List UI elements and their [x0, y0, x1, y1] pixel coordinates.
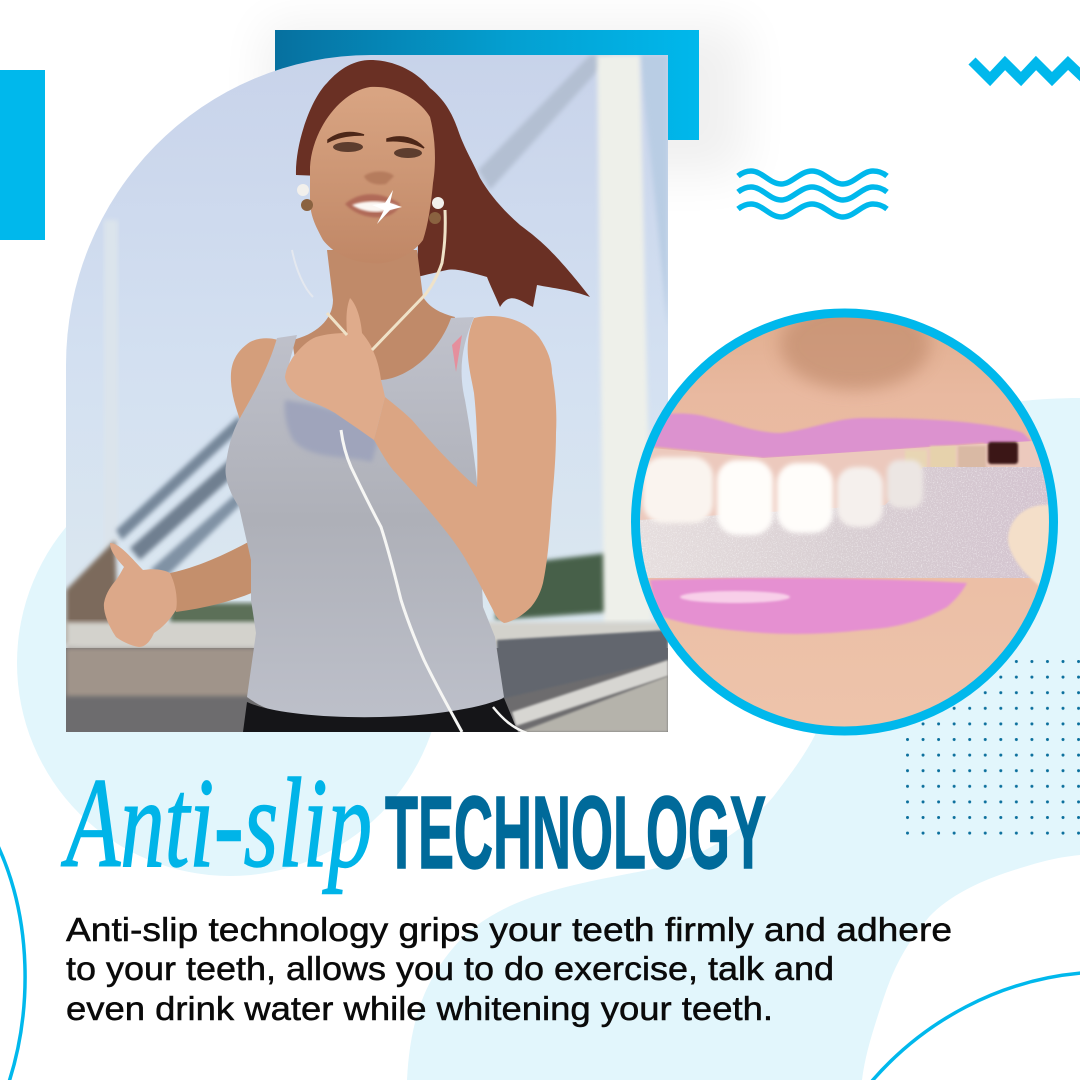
left shoulder — [231, 338, 278, 420]
back teeth — [905, 446, 986, 470]
dark mouth corner — [988, 442, 1018, 464]
description text: even drink water while whitening your teeth. — [66, 990, 773, 1027]
shadow on tank top — [285, 400, 378, 462]
sparkle on teeth — [372, 190, 402, 224]
nose shadow — [364, 172, 394, 185]
strip sparkle — [640, 467, 1050, 578]
smile — [345, 194, 400, 218]
upper lip — [654, 412, 1032, 458]
right fist — [285, 298, 385, 440]
right arm — [374, 316, 556, 623]
blue frame behind photo — [275, 30, 699, 140]
description text: to your teeth, allows you to do exercise, talk and — [66, 950, 834, 987]
heading — [61, 752, 766, 894]
zigzag icon — [972, 61, 1080, 80]
left forearm — [170, 540, 254, 612]
wave icon — [738, 171, 887, 217]
background blob: left — [17, 450, 443, 876]
description text: Anti-slip technology grips your teeth firmly and adhere — [66, 911, 952, 948]
tank top — [226, 317, 504, 722]
finger — [1008, 505, 1050, 594]
script word: Anti-slip — [61, 752, 372, 894]
dot grid — [905, 659, 1080, 840]
lip shine — [680, 591, 790, 603]
blue bar on left edge — [0, 70, 45, 240]
background arc: bottom right — [872, 973, 1080, 1080]
left hand — [104, 543, 177, 647]
earphone cord — [292, 210, 527, 733]
lower lip — [650, 578, 967, 634]
sky — [66, 55, 668, 648]
background blob: right and bottom — [407, 398, 1080, 1080]
eyes and brows — [328, 132, 424, 158]
description text — [66, 911, 952, 1027]
circle inset: teeth whitening strip — [630, 300, 1060, 740]
nose shadow — [780, 300, 930, 390]
shorts — [243, 698, 518, 732]
photo: woman running — [66, 55, 668, 733]
bridge background — [66, 55, 668, 732]
whitening strip — [640, 467, 1050, 578]
upper gum — [640, 440, 1050, 520]
neck and chest — [292, 250, 455, 390]
pink strap — [452, 335, 462, 372]
teeth — [643, 457, 923, 535]
skin background — [648, 318, 1039, 726]
frame shadow — [265, 25, 745, 175]
hair back — [296, 60, 590, 307]
earbuds — [297, 184, 444, 224]
face — [310, 87, 435, 263]
blue ring — [636, 313, 1054, 731]
background arc: bottom left — [0, 846, 25, 1080]
